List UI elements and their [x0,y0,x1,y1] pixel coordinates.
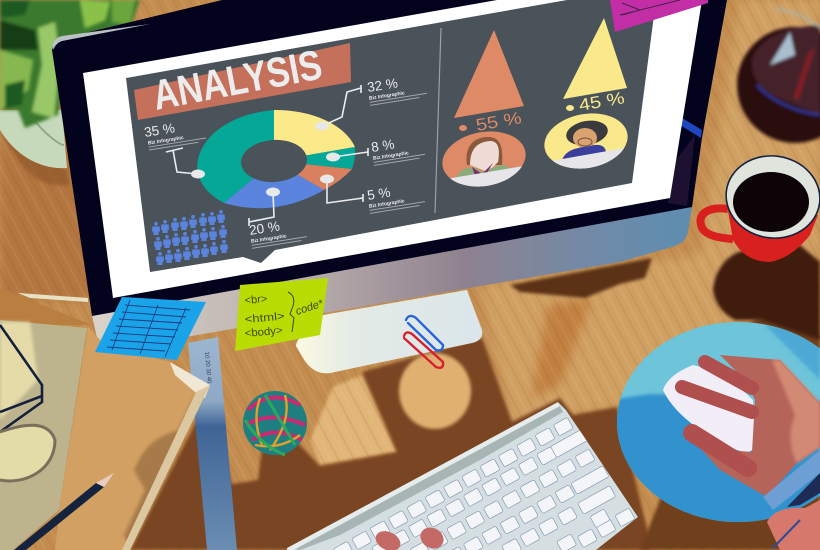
label 5%: 5 % [366,185,391,203]
segment 35% [197,110,274,203]
55 percent [459,108,523,135]
sleeve [787,473,820,507]
segment 5% [274,161,352,190]
segment 32% [274,110,355,161]
typing fingers [372,523,447,550]
green sticky note: <html> [244,311,285,326]
leader dots [191,122,340,196]
label 32% [366,71,427,106]
divider [435,28,441,213]
label 20% [248,214,308,249]
45 percent: 45 % [577,88,626,115]
pencil [14,473,114,550]
folder shadow [124,392,204,550]
lit knuckles [772,360,820,463]
segment 20% [224,161,324,208]
salmon triangle [454,30,524,118]
label 20%: 20 % [248,218,281,238]
glasses shadow [0,425,55,481]
label 8% [370,132,426,166]
leader lines [166,85,368,226]
yellow triangle [563,18,627,99]
cup body [727,205,818,262]
55 percent: 55 % [474,108,523,135]
rim [721,150,820,244]
rubber band ball [243,391,307,455]
green sticky note: <br> [244,293,268,307]
woman avatar [442,131,526,187]
label 5%: Biz Infographic [369,198,405,210]
keyboard [287,402,638,550]
label 20%: Biz Infographic [251,233,287,245]
leaves [0,0,140,128]
monitor chin [92,207,692,350]
glasses [0,325,42,432]
other hand [767,500,820,550]
paper clips [404,316,443,368]
label 35% [143,116,206,151]
handle [700,208,733,239]
manila folder [0,288,210,550]
green sticky note: code* [294,298,325,318]
magenta sticky note [610,0,708,32]
people pictogram [152,210,228,265]
lit oval on the desk [399,353,471,429]
monitor [52,0,727,350]
fingers [682,362,752,468]
monitor stand [296,290,482,373]
coffee cup [700,150,820,262]
red clip [404,332,443,368]
label 32%: Biz Infographic [369,90,405,102]
back of hand [700,355,820,497]
folder corner [170,362,210,398]
donut chart [197,110,355,208]
cuff [763,450,820,510]
computer mouse [663,365,755,452]
green sticky note [235,278,328,351]
label 8%: Biz Infographic [373,150,409,162]
potted plant [0,0,140,168]
hand on mouse [682,355,820,550]
mouse pad [610,320,820,530]
reflection on bezel [680,118,702,138]
donut hole [240,138,308,184]
label 35%: Biz Infographic [148,135,184,147]
label 8%: 8 % [370,137,395,155]
label 35%: 35 % [143,120,176,140]
ruler: 10 20 30 40 [203,352,212,384]
title banner: ANALYSIS [149,41,326,119]
green sticky note: <body> [244,325,283,340]
label 32%: 32 % [366,75,399,95]
pot [0,110,67,168]
45 percent [566,88,626,115]
man avatar [544,113,628,169]
tan paper [0,320,87,550]
monitor bezel [52,0,727,316]
carafe [737,8,820,143]
infographic panel [126,0,656,272]
label 5% [366,179,426,214]
blue clip [406,316,443,350]
coffee [733,172,809,232]
blue sticky note [95,297,206,360]
segment 8% [274,147,355,169]
screen [83,0,702,298]
keys [333,417,635,550]
desk shadows [0,132,820,550]
ruler [188,337,237,550]
